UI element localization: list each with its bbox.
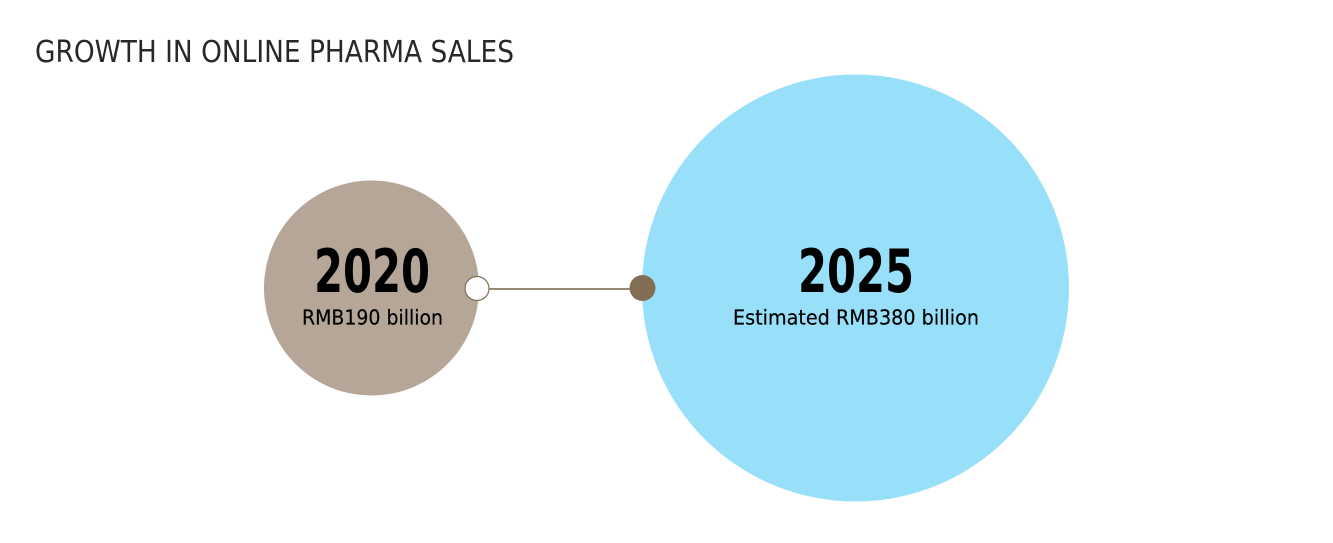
value: Estimated RMB380 billion: Estimated RMB380 billion bbox=[733, 306, 979, 330]
year: 2020: 2020 bbox=[314, 237, 430, 307]
circle: 2025 bbox=[642, 74, 1069, 502]
connector bbox=[465, 275, 656, 301]
year: 2025: 2025 bbox=[798, 237, 914, 307]
value: RMB190 billion: RMB190 billion bbox=[302, 306, 443, 330]
connector end node bbox=[630, 275, 656, 301]
connector start node bbox=[465, 276, 489, 300]
title: GROWTH IN ONLINE PHARMA SALES bbox=[35, 35, 514, 70]
circle: 2020 bbox=[264, 180, 479, 396]
